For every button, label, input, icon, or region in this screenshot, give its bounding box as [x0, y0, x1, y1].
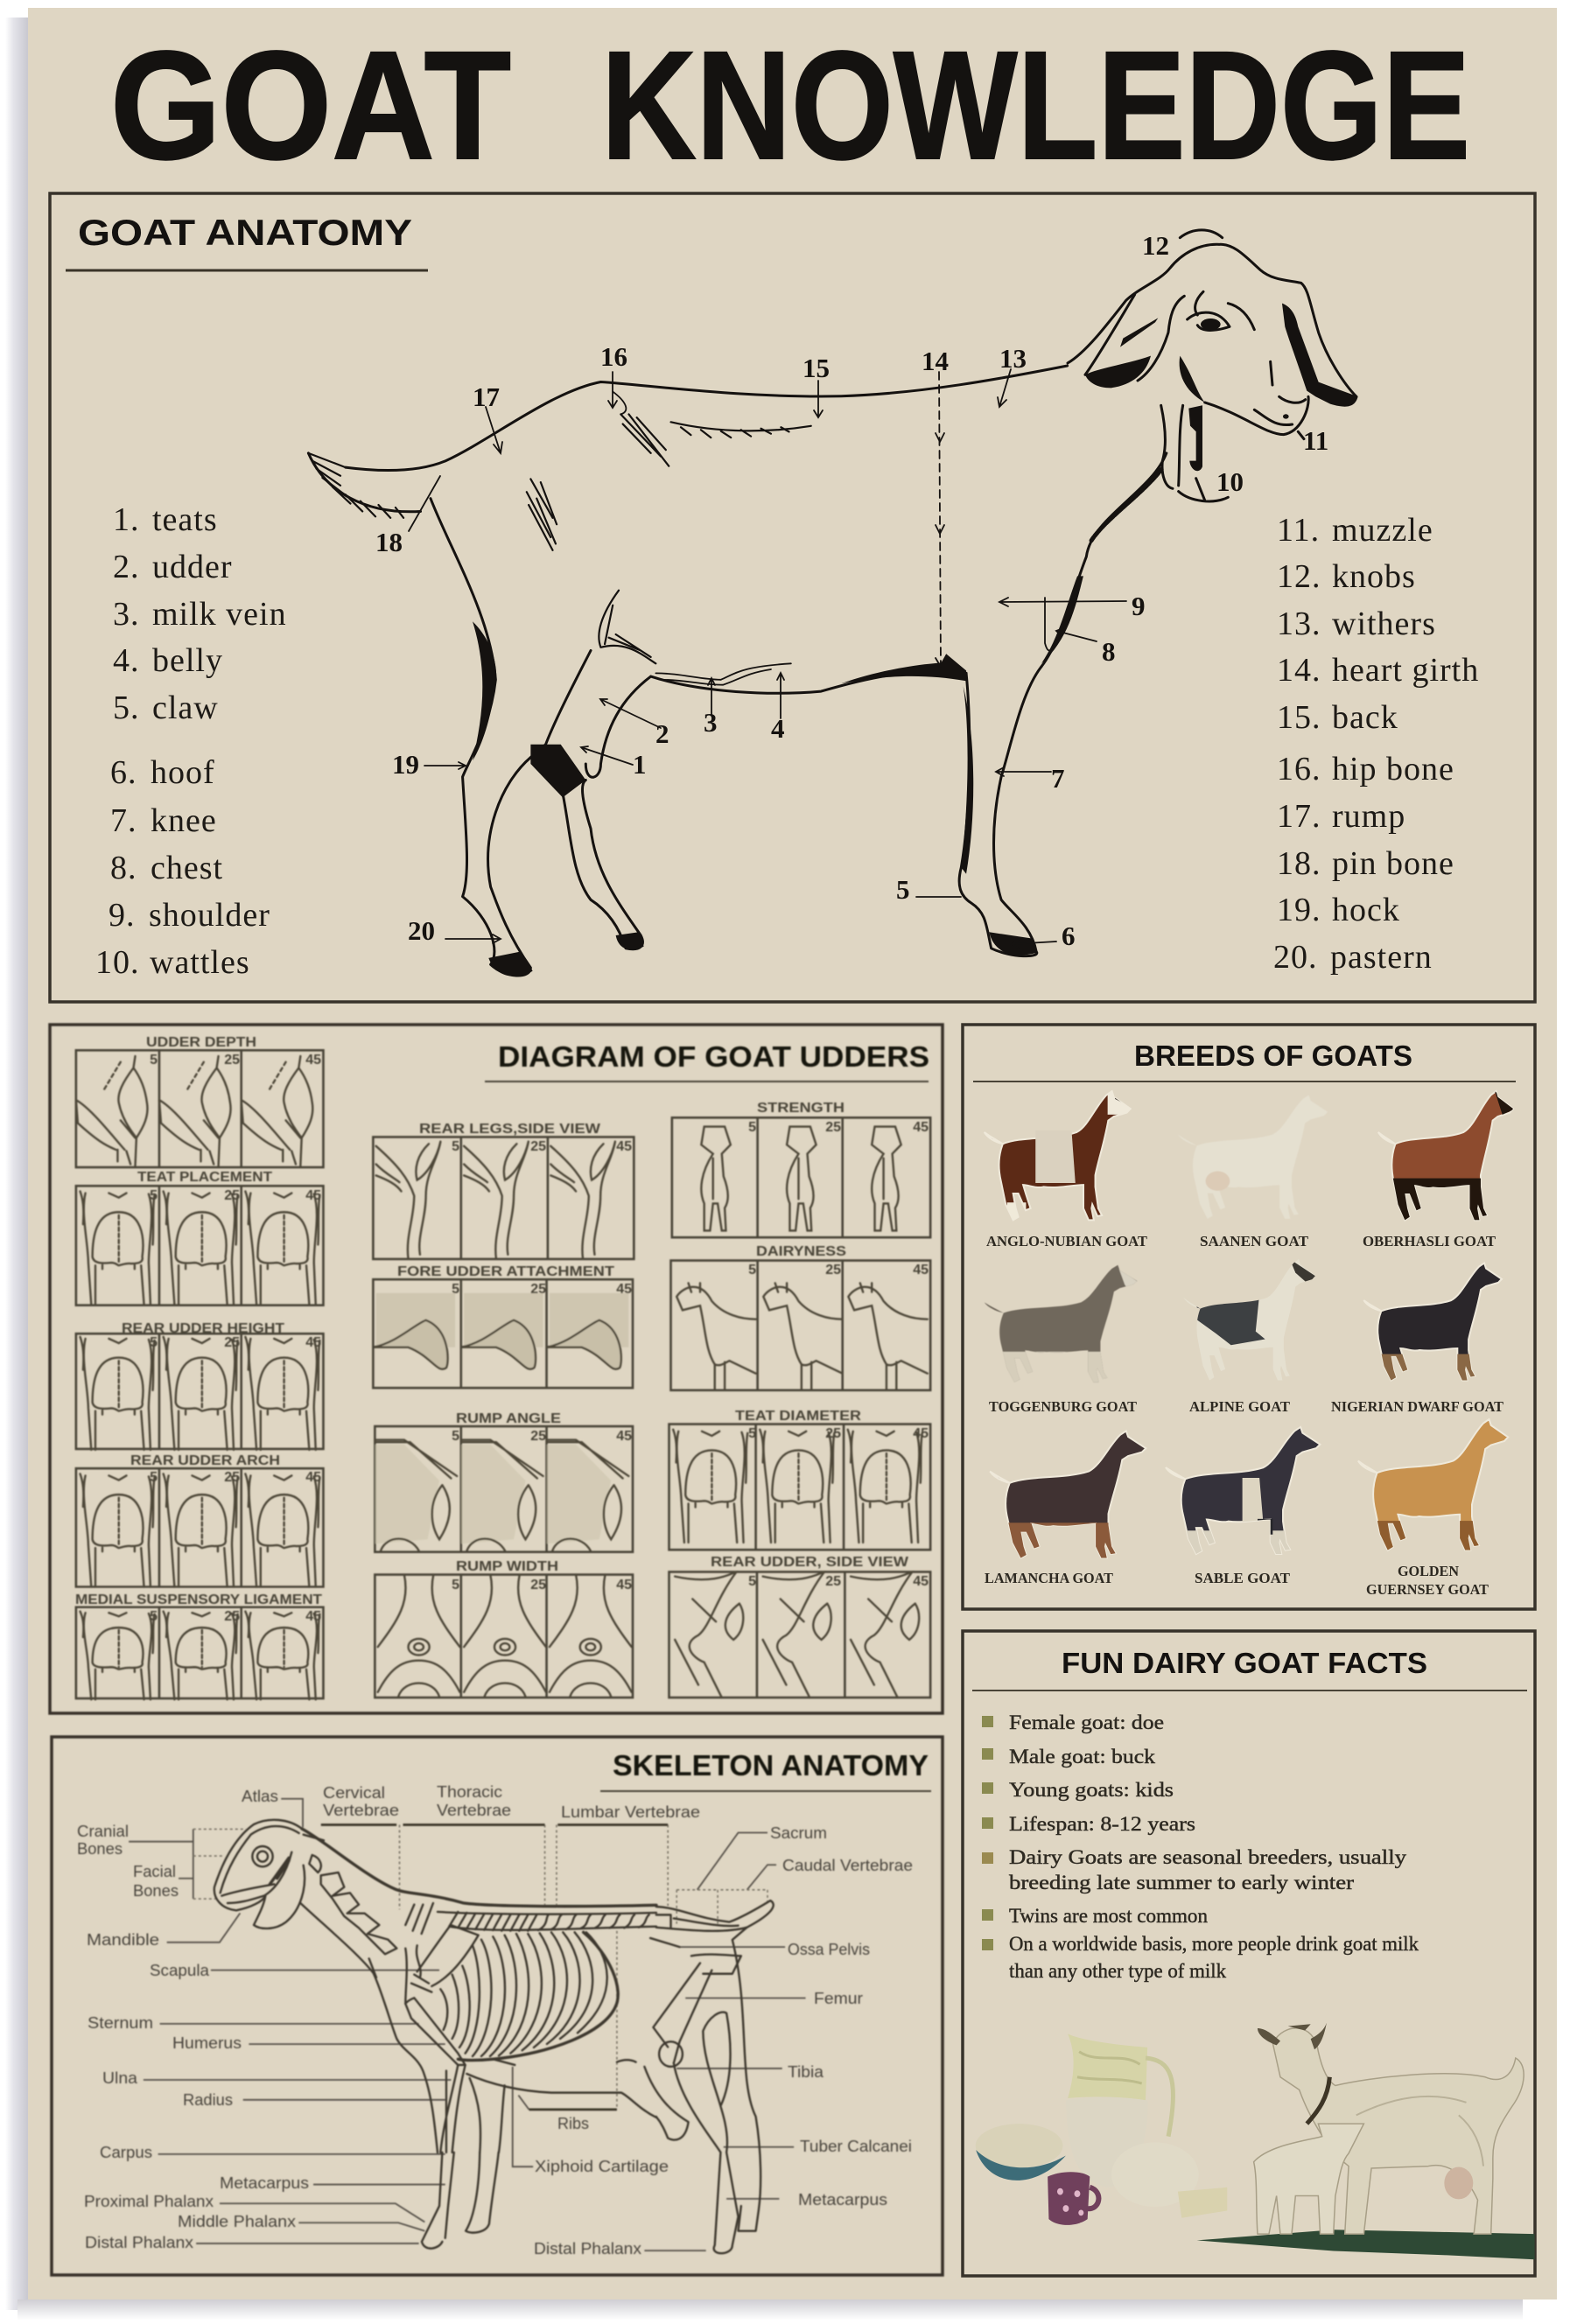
diagram number labels: 18	[375, 527, 403, 557]
skeleton labels: Femur	[814, 1990, 863, 2007]
facts list: On a worldwide basis, more people drink goat milk	[1009, 1933, 1419, 1955]
skeleton labels: Ossa Pelvis	[788, 1941, 870, 1958]
heading: diagram of goat udders: DIAGRAM OF GOAT UDDERS	[498, 1040, 929, 1073]
left parts list: 9.	[109, 897, 135, 934]
chart: rear udder arch: 25	[224, 1470, 240, 1485]
facts list: Male goat: buck	[1009, 1746, 1156, 1768]
skeleton labels: Sternum	[88, 2014, 153, 2032]
left parts list: hoof	[151, 754, 215, 791]
skeleton labels: Mandible	[87, 1931, 159, 1949]
goat head	[1068, 230, 1358, 501]
chart: rear legs side view: 25	[530, 1139, 546, 1154]
right parts list: 20.	[1273, 939, 1318, 976]
illustration: dairy products	[976, 2034, 1227, 2225]
skeleton labels: Radius	[183, 2091, 233, 2109]
skeleton labels: Sacrum	[770, 1824, 827, 1842]
left parts list: wattles	[150, 944, 250, 981]
chart: rear udder side view: 45	[913, 1574, 929, 1589]
right parts list: withers	[1332, 606, 1436, 642]
skeleton labels: Tuber Calcanei	[800, 2138, 912, 2155]
skeleton labels: Caudal Vertebrae	[782, 1857, 913, 1874]
right parts list: pastern	[1330, 939, 1433, 976]
left parts list	[95, 501, 287, 981]
chart: rear udder height: 25	[224, 1335, 240, 1350]
chart: rear legs side view: 5	[452, 1139, 459, 1154]
right parts list: knobs	[1332, 558, 1416, 595]
panel: diagram of goat udders	[50, 1025, 943, 1713]
right parts list: hip bone	[1332, 751, 1454, 788]
breed: alpine: ALPINE GOAT	[1189, 1398, 1291, 1415]
diagram number labels: 7	[1051, 763, 1064, 794]
chart: medial suspensory ligament: 25	[224, 1609, 240, 1624]
skeleton labels: Distal Phalanx	[85, 2234, 193, 2251]
breed: anglo-nubian: ANGLO-NUBIAN GOAT	[986, 1233, 1148, 1250]
skeleton labels: Middle Phalanx	[178, 2213, 296, 2230]
chart: dairyness	[671, 1244, 930, 1390]
chart: rear udder arch: 5	[150, 1470, 158, 1485]
breed: golden guernsey	[1358, 1419, 1514, 1598]
chart: strength: 5	[748, 1120, 756, 1135]
chart: rear udder side view: REAR UDDER, SIDE VIEW	[711, 1555, 909, 1570]
diagram number labels: 1	[633, 749, 646, 780]
chart: teat diameter: 5	[748, 1426, 756, 1441]
breed: oberhasli: OBERHASLI GOAT	[1363, 1233, 1496, 1250]
right parts list: pin bone	[1332, 845, 1454, 882]
breed: lamancha	[985, 1431, 1149, 1586]
chart: teat diameter: TEAT DIAMETER	[735, 1409, 861, 1424]
chart: rear udder height: 45	[305, 1335, 321, 1350]
skeleton labels: Cranial	[77, 1823, 129, 1840]
skeleton labels: Atlas	[242, 1788, 278, 1805]
right parts list: 15.	[1277, 699, 1321, 736]
diagram number labels: 17	[473, 382, 500, 412]
breed: sable	[1166, 1427, 1325, 1586]
chart: medial suspensory ligament: 45	[305, 1609, 321, 1624]
chart: medial suspensory ligament	[75, 1592, 323, 1699]
skeleton labels: Scapula	[150, 1962, 210, 1979]
left parts list: udder	[152, 549, 233, 585]
right parts list: 12.	[1277, 558, 1321, 595]
skeleton labels: Carpus	[100, 2144, 152, 2161]
skeleton labels: Distal Phalanx	[534, 2240, 641, 2258]
right parts list: muzzle	[1332, 512, 1433, 549]
chart: fore udder attachment: 5	[452, 1282, 459, 1297]
skeleton labels: Lumbar Vertebrae	[561, 1803, 700, 1821]
skeleton labels: Metacarpus	[220, 2174, 309, 2192]
chart: rear udder side view: 5	[748, 1574, 756, 1589]
right parts list: 16.	[1277, 751, 1321, 788]
diagram number labels: 11	[1303, 425, 1328, 456]
chart: dairyness: 5	[748, 1263, 756, 1278]
chart: rear udder arch: REAR UDDER ARCH	[130, 1453, 280, 1468]
diagram number labels: 13	[999, 343, 1027, 374]
skeleton labels: Ribs	[557, 2115, 589, 2132]
goat body outline	[308, 366, 1167, 976]
right parts list: 14.	[1277, 652, 1321, 689]
panel: goat anatomy	[50, 193, 1535, 1002]
chart: rear udder side view	[669, 1555, 930, 1698]
skeleton labels: Proximal Phalanx	[84, 2193, 214, 2210]
skeleton labels: Vertebrae	[323, 1802, 399, 1819]
chart: rump width: 5	[452, 1578, 459, 1592]
right parts list: hock	[1332, 892, 1400, 928]
breed: nigerian dwarf: NIGERIAN DWARF GOAT	[1331, 1398, 1504, 1415]
breed: oberhasli	[1363, 1091, 1516, 1250]
chart: teat placement: 45	[305, 1188, 321, 1203]
chart: udder depth: 45	[305, 1053, 321, 1068]
chart: rump width: 25	[530, 1578, 546, 1592]
arrows and pointers	[409, 369, 1126, 948]
right parts list: 11.	[1277, 512, 1320, 549]
skeleton labels: Cervical	[323, 1784, 385, 1802]
diagram number labels: 2	[655, 718, 669, 749]
diagram number labels: 6	[1062, 920, 1075, 951]
chart: teat diameter: 25	[825, 1426, 841, 1441]
chart: rump angle: 25	[530, 1429, 546, 1444]
breed: golden guernsey: GOLDEN	[1398, 1563, 1460, 1579]
chart: rump angle: 5	[452, 1429, 459, 1444]
chart: dairyness: DAIRYNESS	[756, 1244, 846, 1259]
left parts list: claw	[152, 690, 219, 726]
chart: medial suspensory ligament: MEDIAL SUSPENSORY LIGAMENT	[75, 1592, 322, 1607]
left parts list: 2.	[113, 549, 140, 585]
goat anatomy diagram	[308, 230, 1358, 976]
chart: fore udder attachment: 45	[616, 1282, 632, 1297]
heading: fun dairy goat facts: FUN DAIRY GOAT FACTS	[1062, 1647, 1427, 1679]
diagram number labels: 4	[771, 713, 784, 744]
skeleton labels: Tibia	[788, 2063, 824, 2081]
heading: breeds of goats: BREEDS OF GOATS	[1134, 1040, 1412, 1072]
chart: udder depth: UDDER DEPTH	[146, 1035, 256, 1050]
skeleton labels: Metacarpus	[798, 2191, 887, 2208]
left parts list: 1.	[113, 501, 140, 538]
skeleton labels: Ulna	[102, 2069, 138, 2087]
chart: teat diameter	[669, 1409, 930, 1550]
facts list: than any other type of milk	[1009, 1960, 1226, 1982]
diagram number labels: 9	[1132, 591, 1145, 621]
skeleton labels: Thoracic	[437, 1783, 502, 1801]
left parts list: 6.	[110, 754, 137, 791]
right parts list: 17.	[1277, 798, 1321, 835]
facts list: Female goat: doe	[1009, 1712, 1164, 1733]
facts list: Young goats: kids	[1009, 1779, 1174, 1801]
panel: fun dairy goat facts	[963, 1631, 1535, 2276]
left parts list: 8.	[110, 850, 137, 886]
skeleton labels: Bones	[77, 1840, 123, 1858]
facts list: Dairy Goats are seasonal breeders, usually	[1009, 1846, 1407, 1868]
chart: rear legs side view: 45	[616, 1139, 632, 1154]
right parts list: back	[1332, 699, 1398, 736]
breed: alpine	[1183, 1259, 1316, 1415]
title	[110, 20, 1470, 192]
facts list: breeding late summer to early winter	[1009, 1872, 1354, 1894]
left parts list: milk vein	[152, 596, 287, 633]
facts list: Lifespan: 8-12 years	[1009, 1813, 1195, 1835]
chart: fore udder attachment: 25	[530, 1282, 546, 1297]
chart: udder depth: 5	[150, 1053, 158, 1068]
chart: rear udder arch	[76, 1453, 323, 1586]
left parts list: teats	[152, 501, 218, 538]
right parts list: 19.	[1277, 892, 1321, 928]
skeleton labels: Facial	[133, 1863, 176, 1880]
skeleton drawing: hindquarters and lower legs	[422, 1900, 774, 2253]
chart: rump angle	[375, 1411, 633, 1552]
chart: rump angle: 45	[616, 1429, 632, 1444]
chart: rump width	[375, 1559, 633, 1698]
diagram number labels: 3	[704, 707, 718, 738]
skeleton labels: Bones	[133, 1882, 179, 1900]
right parts list: rump	[1332, 798, 1405, 835]
chart: rump angle: RUMP ANGLE	[456, 1411, 561, 1426]
facts list	[982, 1712, 1419, 1982]
left parts list: belly	[152, 642, 223, 679]
chart: strength: STRENGTH	[757, 1101, 845, 1116]
heading: skeleton anatomy: SKELETON ANATOMY	[613, 1749, 929, 1782]
left parts list: 10.	[95, 944, 140, 981]
chart: fore udder attachment: FORE UDDER ATTACHMENT	[397, 1264, 614, 1279]
chart: teat placement: 25	[224, 1188, 240, 1203]
chart: rear udder height: REAR UDDER HEIGHT	[122, 1321, 284, 1336]
right parts list	[1273, 512, 1479, 976]
chart: dairyness: 45	[913, 1263, 929, 1278]
chart: teat placement	[76, 1170, 323, 1306]
chart: teat placement: TEAT PLACEMENT	[137, 1170, 272, 1185]
diagram number labels: 8	[1102, 636, 1115, 667]
diagram number labels: 15	[803, 353, 830, 383]
illustration: goat and kid	[1197, 2023, 1535, 2259]
chart: rear legs side view	[373, 1122, 634, 1259]
chart: medial suspensory ligament: 5	[150, 1609, 158, 1624]
chart: udder depth: 25	[224, 1053, 240, 1068]
left parts list: knee	[151, 802, 217, 839]
diagram number labels: 12	[1142, 230, 1169, 261]
chart: dairyness: 25	[825, 1263, 841, 1278]
diagram number labels: 16	[600, 341, 627, 372]
breed: toggenburg: TOGGENBURG GOAT	[989, 1398, 1138, 1415]
chart: rump width: 45	[616, 1578, 632, 1592]
skeleton drawing: head, neck and ribcage	[214, 1820, 656, 2152]
facts list: Twins are most common	[1009, 1905, 1208, 1927]
heading: goat anatomy: GOAT ANATOMY	[78, 212, 412, 253]
left parts list: 3.	[113, 596, 140, 633]
left parts list: 7.	[110, 802, 137, 839]
chart: fore udder attachment	[373, 1264, 633, 1388]
breed: golden guernsey: GUERNSEY GOAT	[1366, 1581, 1489, 1598]
chart: rear udder arch: 45	[305, 1470, 321, 1485]
chart: strength	[672, 1101, 930, 1237]
diagram number labels: 10	[1216, 466, 1244, 497]
chart: strength: 25	[825, 1120, 841, 1135]
right parts list: heart girth	[1332, 652, 1479, 689]
right parts list: 13.	[1277, 606, 1321, 642]
diagram number labels: 19	[392, 749, 419, 780]
chart: teat diameter: 45	[913, 1426, 929, 1441]
breed: toggenburg	[985, 1265, 1144, 1415]
diagram number labels: 14	[922, 346, 949, 376]
breed: lamancha: LAMANCHA GOAT	[985, 1570, 1114, 1586]
chart: udder depth	[76, 1035, 323, 1167]
left parts list: chest	[151, 850, 223, 886]
diagram number labels: 5	[896, 874, 910, 905]
chart: teat placement: 5	[150, 1188, 158, 1203]
breed: anglo-nubian	[985, 1091, 1148, 1250]
panel: skeleton anatomy	[52, 1737, 943, 2275]
diagram number labels	[375, 230, 1328, 951]
breed: saanen	[1178, 1096, 1328, 1250]
breed: nigerian dwarf	[1331, 1263, 1504, 1415]
breed: sable: SABLE GOAT	[1195, 1570, 1291, 1586]
chart: rear legs side view: REAR LEGS,SIDE VIEW	[419, 1122, 601, 1137]
left parts list: shoulder	[149, 897, 270, 934]
skeleton labels: Xiphoid Cartilage	[535, 2158, 669, 2175]
chart: rump width: RUMP WIDTH	[456, 1559, 558, 1574]
panel: breeds of goats	[963, 1025, 1535, 1609]
skeleton labels: Humerus	[172, 2034, 242, 2052]
left parts list: 4.	[113, 642, 140, 679]
chart: rear udder height	[76, 1321, 323, 1450]
chart: strength: 45	[913, 1120, 929, 1135]
left parts list: 5.	[113, 690, 140, 726]
skeleton leader lines	[129, 1799, 806, 2250]
right parts list: 18.	[1277, 845, 1321, 882]
chart: rear udder side view: 25	[825, 1574, 841, 1589]
breed: saanen: SAANEN GOAT	[1200, 1233, 1309, 1250]
skeleton labels	[77, 1783, 913, 2258]
title: GOAT	[110, 20, 511, 192]
diagram number labels: 20	[408, 915, 435, 946]
skeleton labels: Vertebrae	[437, 1802, 511, 1819]
chart: rear udder height: 5	[150, 1335, 158, 1350]
